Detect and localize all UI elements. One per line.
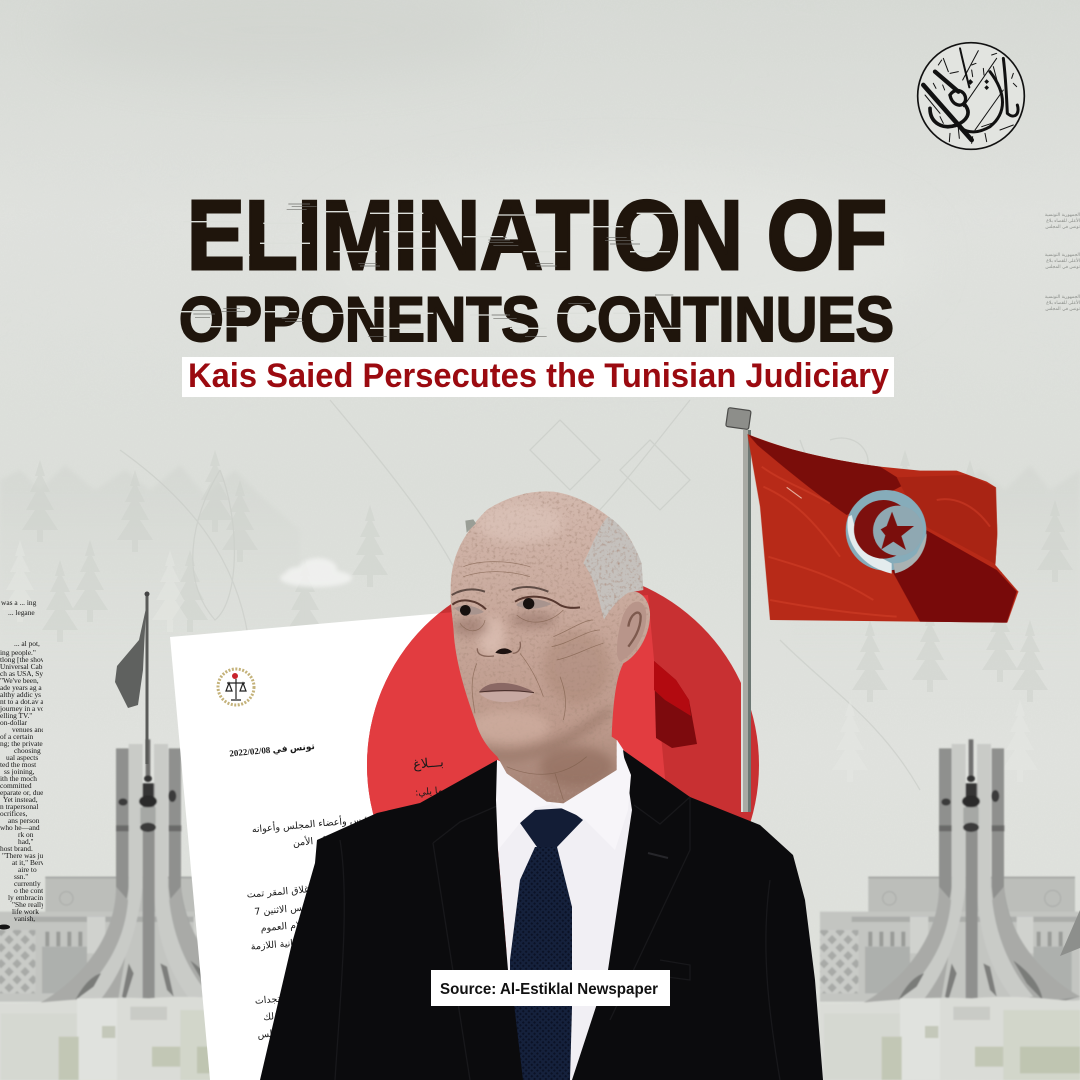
document text: علم بذلك	[263, 1009, 300, 1023]
ear	[617, 602, 646, 662]
title line 2: OPPONENTS CONTINUES	[179, 285, 894, 355]
newspaper clipping: life work	[12, 907, 39, 916]
hair	[583, 517, 643, 619]
forest silhouettes	[0, 450, 1080, 782]
newspaper clipping: ng; the private	[0, 739, 43, 748]
document text: رئيس وأعضاء المجلس وأعوانه	[251, 812, 373, 835]
newspaper clipping: ual aspects	[6, 753, 38, 762]
subtitle: Kais Saied Persecutes the Tunisian Judiciary	[188, 357, 889, 395]
small flag beside doc	[654, 661, 697, 748]
document: official statement	[170, 569, 759, 1080]
document text	[229, 741, 468, 1041]
newspaper clipping: Yet instead,	[3, 795, 38, 804]
suit jacket	[260, 750, 823, 1080]
flag on left monument	[115, 592, 150, 764]
small arabic text fragments: تونس في المجلس	[1045, 265, 1080, 270]
newspaper clipping: ch as USA, Syfy,	[0, 669, 51, 678]
document text: العام بما يلي:	[415, 783, 468, 799]
newspaper clipping: at it," Berwi	[12, 858, 48, 867]
small arabic text fragments: الجمهورية التونسية	[1045, 253, 1080, 258]
newspaper clipping: venues and	[12, 725, 45, 734]
mouth	[479, 683, 533, 693]
newspaper clipping: on-dollar	[0, 718, 28, 727]
brows	[452, 589, 485, 595]
newspaper clipping: choosing	[14, 746, 41, 755]
shirt	[496, 740, 640, 1080]
small arabic text fragments	[1045, 213, 1080, 312]
newspaper clipping: tlong [the show	[0, 655, 47, 664]
tie	[510, 808, 583, 1080]
head and neck	[451, 491, 650, 803]
title glitch streaks	[177, 204, 682, 337]
small arabic text fragments: الجمهورية التونسية	[1045, 213, 1080, 218]
newspaper clipping: eparate or, due	[0, 788, 44, 797]
newspaper clipping: of a certain	[0, 732, 34, 741]
newspaper clipping: "We've been,	[0, 676, 39, 685]
newspaper clipping: host brand.	[0, 844, 33, 853]
newspaper clipping: ted the most	[0, 760, 37, 769]
newspaper clipping: ing people."	[0, 648, 36, 657]
lapels	[335, 797, 780, 1080]
newspaper clipping: ith the moch	[0, 774, 37, 783]
document sheet	[170, 595, 693, 1080]
document text: من قبل أعوان الأمن	[292, 829, 372, 849]
newspaper clipping: "There was just	[2, 851, 49, 860]
small arabic text fragments: الأعلى للقضاء بلاغ	[1046, 217, 1080, 224]
document seal	[218, 669, 254, 705]
newspaper clipping: committed	[0, 781, 32, 790]
document text: المجلس	[257, 1027, 290, 1041]
newspaper clipping: n trapersonal	[0, 802, 38, 811]
hairline tuft	[465, 519, 476, 533]
newspaper clipping: vanish,	[14, 914, 35, 923]
newspaper clipping: Universal Cable	[0, 662, 49, 671]
faint calligraphy watermark	[120, 400, 920, 790]
document text: تونس في 2022/02/08	[229, 741, 315, 759]
tunisian flag	[747, 434, 1018, 623]
small arabic text fragments: الأعلى للقضاء بلاغ	[1046, 257, 1080, 264]
newspaper clipping: "She really	[12, 900, 45, 909]
flag fragment on right edge	[1060, 910, 1080, 956]
newspaper clipping: nt to a dot.av a	[0, 697, 44, 706]
collar	[496, 740, 631, 850]
logo: calligraphy seal	[918, 43, 1024, 149]
newspaper clipping: ... legane	[8, 608, 35, 617]
newspaper clipping: o the cont	[14, 886, 44, 895]
newspaper clipping	[0, 600, 43, 930]
monument: left	[0, 739, 257, 1080]
wrinkles	[460, 562, 603, 800]
newspaper clipping: currently	[14, 879, 41, 888]
eyes	[455, 605, 484, 615]
small arabic text fragments: الأعلى للقضاء بلاغ	[1046, 299, 1080, 306]
document text: أمس الاثنين 7	[254, 900, 311, 918]
title line 1: ELIMINATION OF	[187, 180, 887, 290]
newspaper clipping: rk on	[18, 830, 34, 839]
document text: إعلام العموم	[260, 919, 311, 934]
newspaper clipping: althy addic ys	[0, 690, 41, 699]
document text: الجانية اللازمة	[250, 937, 305, 953]
title	[179, 180, 894, 355]
newspaper clipping: ss joining,	[4, 767, 35, 776]
face shading	[452, 503, 613, 787]
newspaper clipping: aire to	[18, 865, 37, 874]
newspaper clipping: ocrifices,	[0, 809, 27, 818]
newspaper clipping: ans person	[8, 816, 40, 825]
newspaper clipping: ssn."	[14, 872, 28, 881]
cloud	[280, 558, 352, 587]
small arabic text fragments: تونس في المجلس	[1045, 225, 1080, 230]
source label: Source: Al-Estiklal Newspaper	[440, 981, 658, 998]
source label	[431, 970, 670, 1006]
newspaper clipping: ly embracin	[8, 893, 43, 902]
newspaper clipping: had,"	[18, 837, 34, 846]
small arabic text fragments: تونس في المجلس	[1045, 307, 1080, 312]
document text: المستجدات	[254, 992, 300, 1007]
newspaper clipping: ade years ag a	[0, 683, 42, 692]
newspaper clipping: elling TV."	[0, 711, 32, 720]
flagpole	[726, 408, 751, 812]
newspaper clipping: ... al pot,	[14, 639, 40, 648]
small arabic text fragments: الجمهورية التونسية	[1045, 295, 1080, 300]
document text: بـــلاغ	[413, 755, 444, 773]
red circle	[367, 569, 759, 961]
document text: إغلاق المقر تمت	[246, 884, 313, 901]
man: president	[260, 491, 823, 1080]
nose	[495, 648, 512, 654]
newspaper clipping: who he—and	[0, 823, 40, 832]
monument: right	[820, 739, 1080, 1080]
newspaper clipping: journey in a vo	[0, 704, 45, 713]
newspaper clipping: was a ... ing	[1, 598, 37, 607]
